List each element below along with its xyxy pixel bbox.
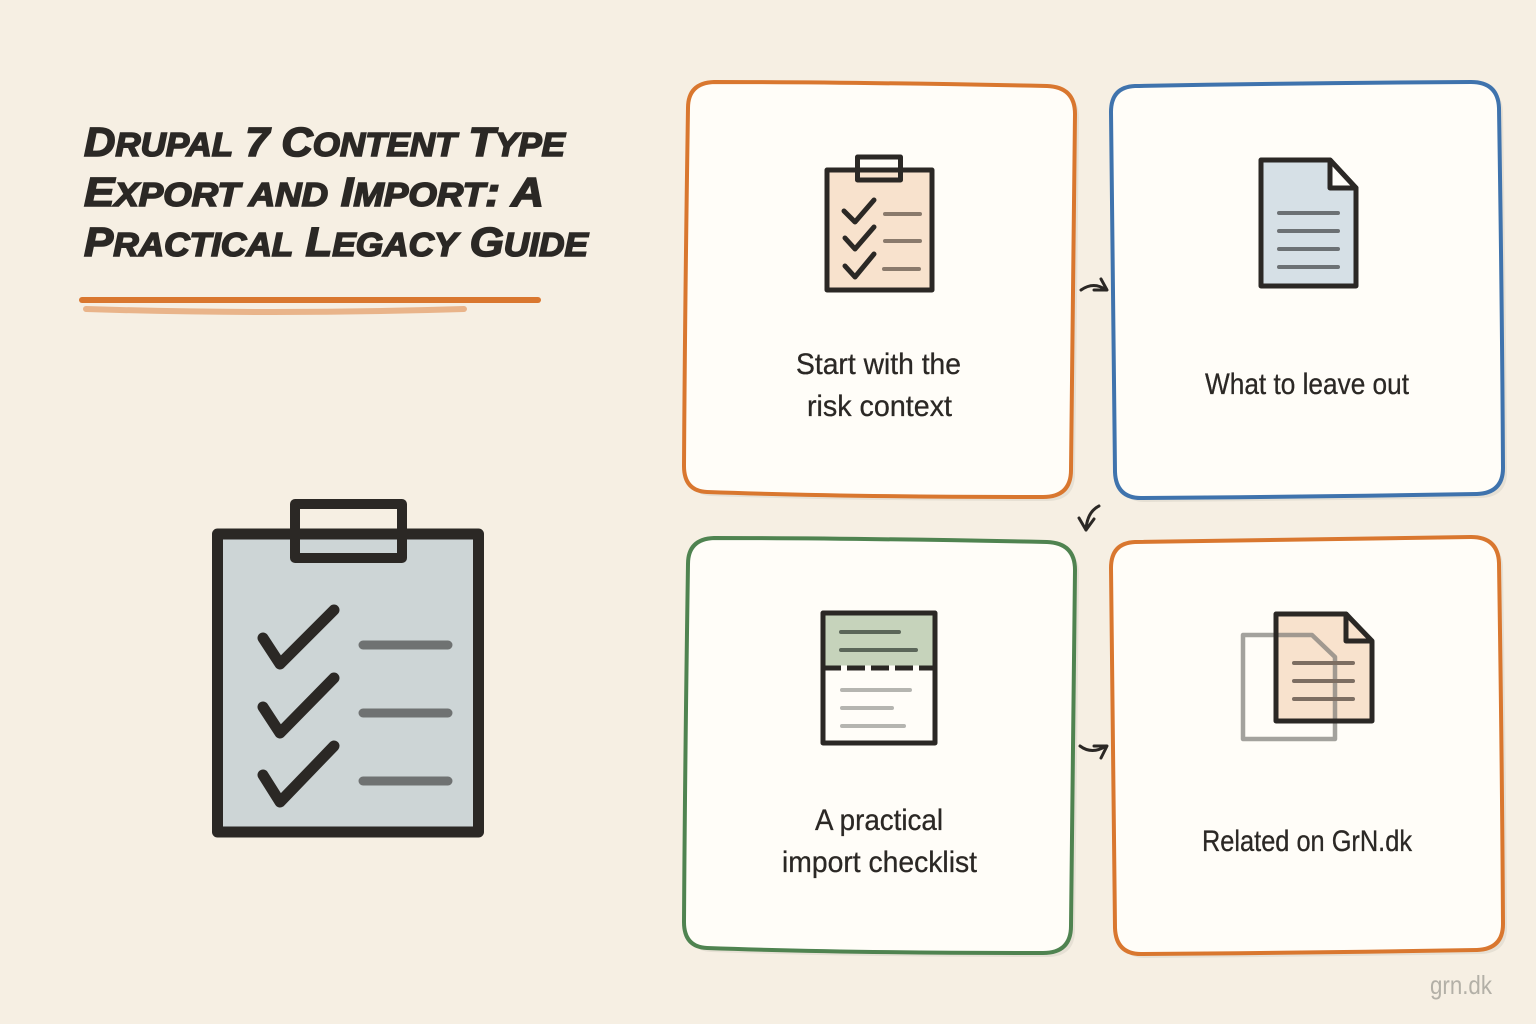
label: related on grn.dk: Related on GrN.dk	[1202, 825, 1413, 858]
icon: split table	[823, 613, 935, 743]
label: a practical import checklist: A practical	[815, 804, 943, 837]
label: a practical import checklist: import checklist	[782, 846, 978, 879]
panel: related on grn.dk	[1111, 537, 1507, 958]
panel: a practical import checklist	[684, 538, 1079, 957]
label: start with the risk context	[796, 348, 961, 423]
title: EXPORT AND IMPORT : A	[84, 169, 544, 215]
title underline	[82, 300, 538, 312]
label: start with the risk context: Start with the	[796, 348, 961, 381]
panel: what to leave out	[1111, 82, 1507, 502]
title: PRACTICAL LEGACY GUIDE	[84, 219, 589, 265]
icon: overlapping documents	[1243, 614, 1372, 739]
label: what to leave out: What to leave out	[1205, 368, 1410, 401]
arrow: second to third panel	[1079, 506, 1099, 530]
watermark: grn.dk	[1430, 970, 1493, 1000]
panel: start with the risk context	[684, 82, 1079, 501]
icon: large clipboard checklist	[218, 504, 478, 832]
title	[84, 119, 589, 265]
title: DRUPAL 7 CONTENT TYPE	[84, 119, 566, 165]
arrow: first to second panel	[1081, 279, 1107, 290]
icon: clipboard	[827, 157, 932, 290]
arrow: third to fourth panel	[1080, 746, 1107, 758]
label: a practical import checklist	[782, 804, 978, 879]
icon: document	[1261, 160, 1356, 286]
label: start with the risk context: risk context	[807, 390, 953, 423]
